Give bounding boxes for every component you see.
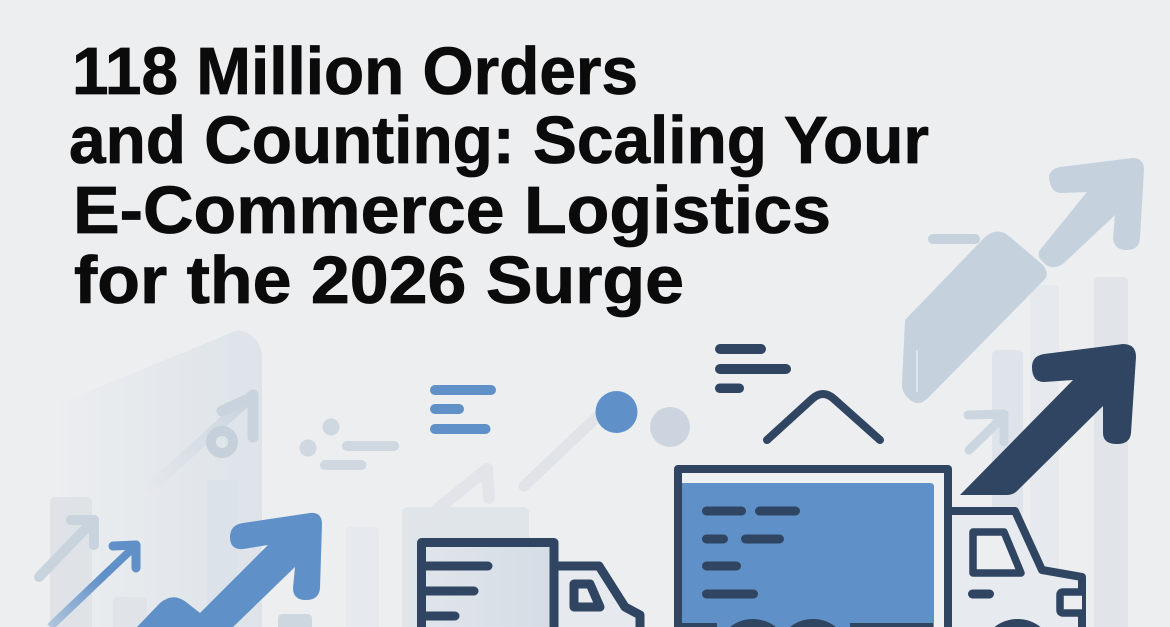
background bars left xyxy=(50,330,529,627)
icon: large delivery truck xyxy=(674,469,1082,627)
background bars right xyxy=(992,277,1128,627)
icon: blue lines xyxy=(430,385,496,434)
icon: large blue arrow xyxy=(137,513,322,627)
icon: grey arrow lower left xyxy=(39,520,94,577)
icon: faint chevron arrow xyxy=(408,469,489,533)
icon: small delivery truck xyxy=(421,542,641,627)
icon: grey dots and dashes xyxy=(300,418,399,470)
icon: top-right grey arrow xyxy=(1039,158,1144,267)
title: for the 2026 Surge xyxy=(74,243,684,318)
title xyxy=(69,34,929,318)
icon: connector with blue and grey dots xyxy=(524,391,690,486)
cargo box xyxy=(674,469,948,627)
icon: grey dash xyxy=(928,234,980,244)
title: E-Commerce Logistics xyxy=(73,173,831,248)
icon: large dark arrow xyxy=(960,344,1136,495)
cargo text lines xyxy=(702,506,800,598)
icon: chevron xyxy=(767,394,880,440)
icon: tilted grey parcel xyxy=(902,232,1047,403)
icon: dark lines above roof xyxy=(715,344,791,393)
icon: thin blue arrow xyxy=(50,545,136,627)
truck cab xyxy=(952,511,1082,627)
title: and Counting: Scaling Your xyxy=(69,103,929,178)
icon: small faint arrow xyxy=(968,414,1004,450)
title: 118 Million Orders xyxy=(72,34,638,109)
icon: faint arrow with ring xyxy=(145,395,253,493)
